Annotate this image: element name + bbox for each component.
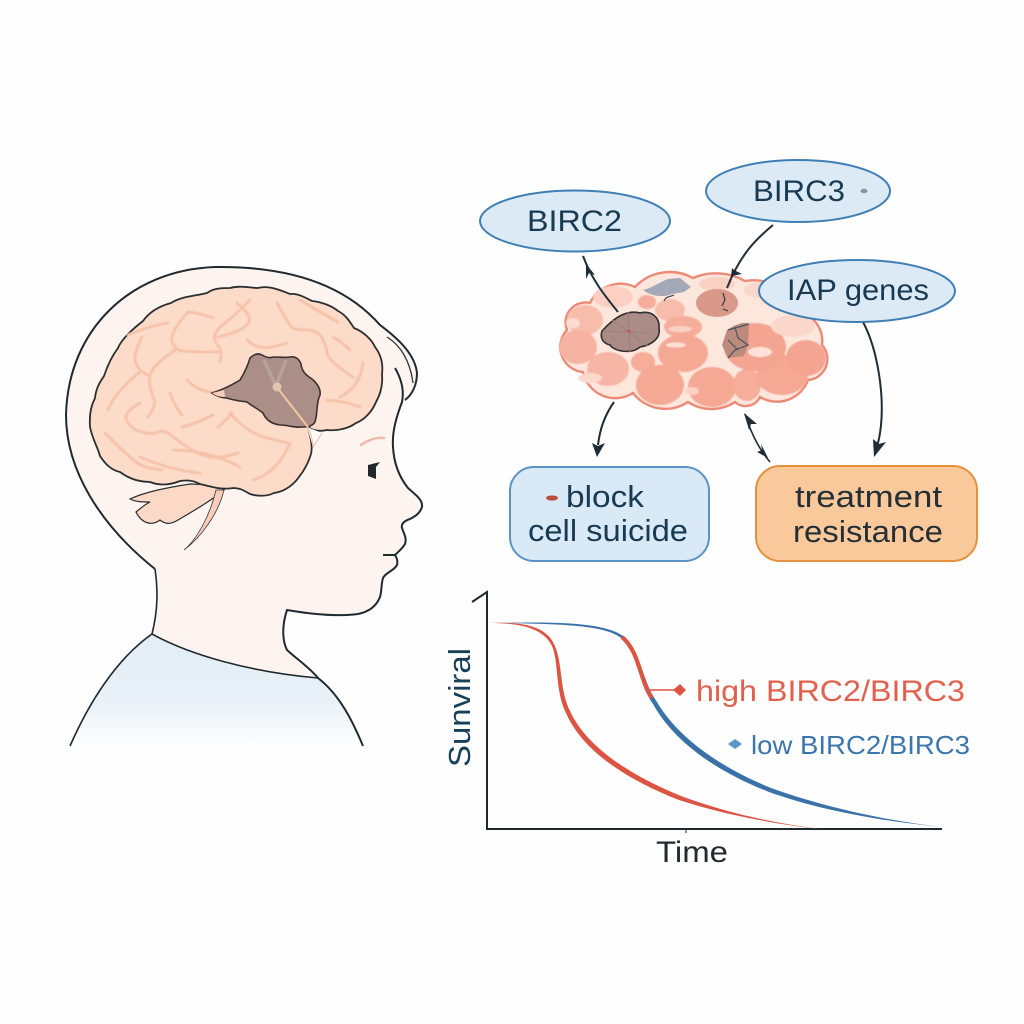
box: treatment resistance <box>756 466 977 561</box>
x-axis tick <box>685 829 687 833</box>
brain folds <box>105 300 363 480</box>
arrow: IAP genes to treatment resistance <box>863 322 886 457</box>
survival chart <box>442 592 970 869</box>
eye <box>368 462 380 479</box>
legend: low BIRC2/BIRC3: low BIRC2/BIRC3 <box>751 730 970 760</box>
oval label: BIRC3: BIRC3 <box>753 175 845 208</box>
x-axis label: Time <box>656 836 728 869</box>
shirt <box>70 634 363 746</box>
head silhouette <box>66 267 422 678</box>
oval label: IAP genes <box>759 260 955 322</box>
y-axis label: Sunviral <box>442 648 477 767</box>
neck and shoulder lines <box>70 569 318 746</box>
oval label: IAP genes: IAP genes <box>787 274 929 307</box>
red segment on blue curve <box>622 637 652 698</box>
box: block cell suicide: block <box>566 479 645 514</box>
oval label: BIRC2 <box>480 190 670 252</box>
legend: high BIRC2/BIRC3: high BIRC2/BIRC3 <box>696 675 965 708</box>
tissue base <box>560 272 827 409</box>
illustration: child head with brain tumor <box>66 267 422 746</box>
arrow: tumor and treatment resistance double arrow <box>744 413 770 462</box>
box: treatment resistance: resistance <box>793 514 943 549</box>
box: block cell suicide: cell suicide <box>528 513 688 548</box>
dark tumor patch: right <box>722 323 749 358</box>
arrow: tumor to BIRC2 <box>583 256 618 312</box>
tumor in brain <box>212 354 322 447</box>
oval label: BIRC3 <box>706 160 890 222</box>
brain <box>90 287 382 496</box>
oval label: BIRC2: BIRC2 <box>527 205 622 238</box>
cerebellum and brainstem fibres <box>130 484 224 550</box>
eyebrow <box>361 438 384 445</box>
arrow: tumor to block cell suicide <box>592 402 614 457</box>
dark tumor patch: BIRC2 <box>601 312 659 351</box>
tumor tissue cluster <box>559 272 827 409</box>
box: block cell suicide <box>510 467 709 561</box>
blue survival curve <box>500 623 942 827</box>
hair strand <box>387 337 413 383</box>
red core mark <box>628 330 630 332</box>
axes <box>472 592 942 829</box>
arrow: BIRC3 to tumor <box>727 225 773 288</box>
face profile <box>283 368 422 746</box>
head outline <box>66 267 417 569</box>
box: treatment resistance: treatment <box>795 479 942 514</box>
tissue lobules <box>559 277 826 407</box>
tumor patch: BIRC3 side <box>696 289 738 317</box>
red survival curve <box>490 623 820 829</box>
gray tumor fragment top <box>643 278 691 296</box>
